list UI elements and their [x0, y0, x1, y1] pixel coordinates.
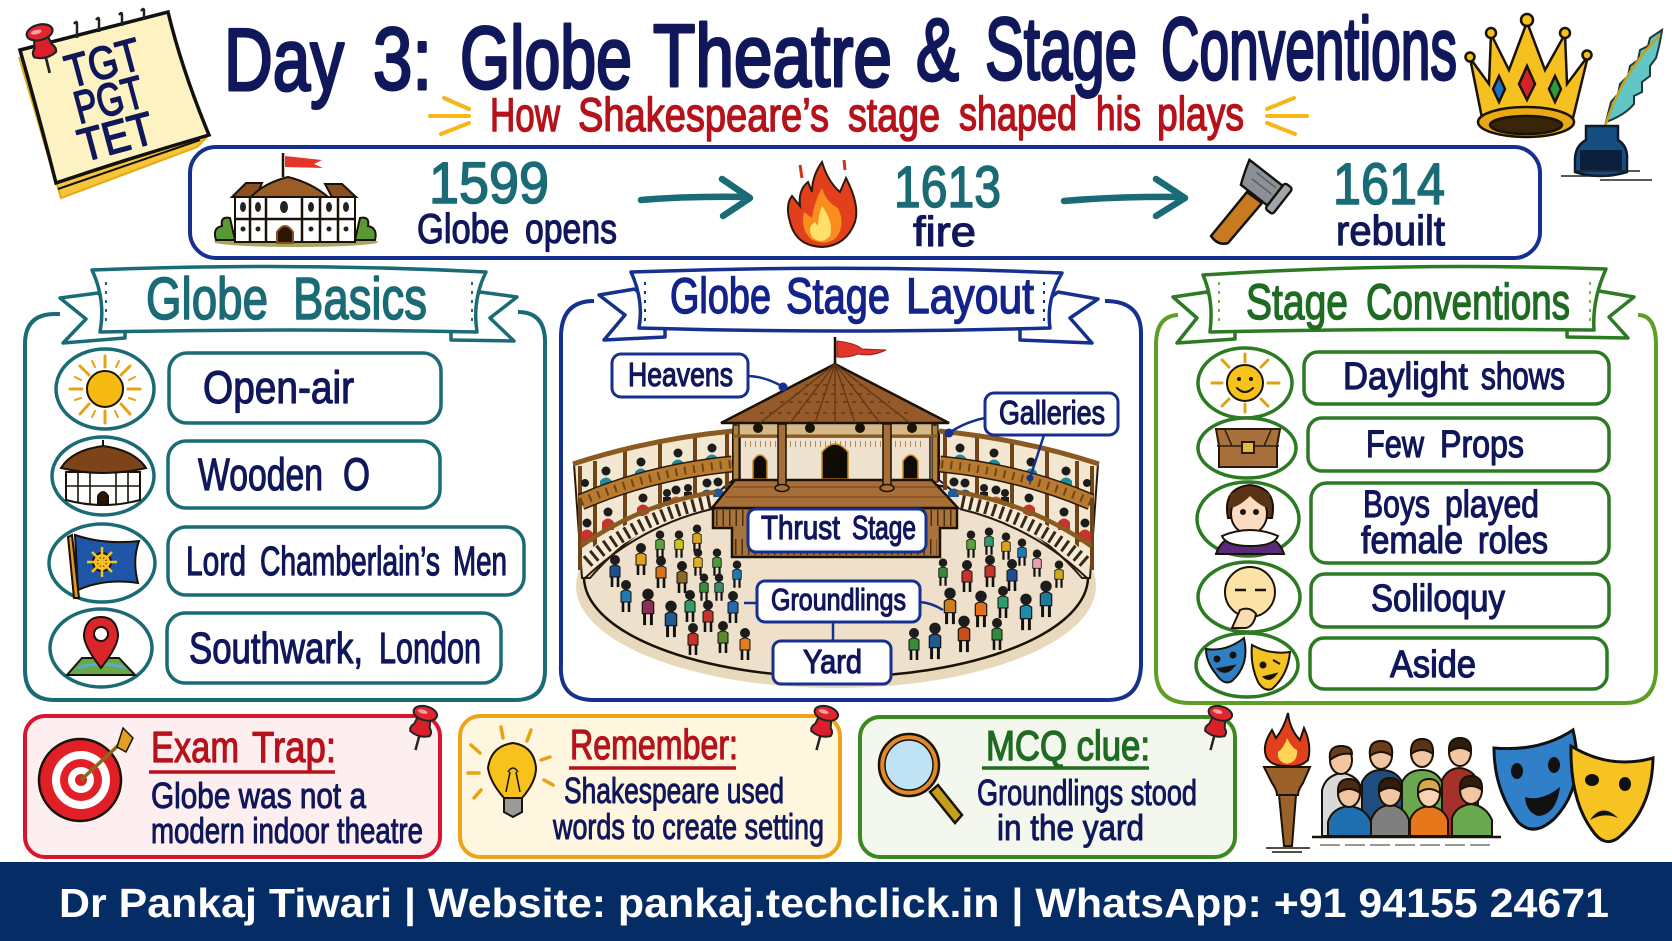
- stage house: [721, 337, 949, 482]
- row: Southwark, London: [50, 609, 501, 687]
- yard ground: [576, 477, 1096, 688]
- text: Exam Trap heading: Exam: [151, 723, 239, 772]
- icon: pushpin: [805, 703, 840, 753]
- banner: Globe Stage Layout: [599, 268, 1098, 343]
- icon: target with arrow: [39, 728, 133, 821]
- arrow: 1599 to 1613: [641, 179, 750, 216]
- subtitle: shaped: [959, 87, 1077, 140]
- banner: Globe Stage Layout: Globe: [670, 268, 771, 324]
- text: Remember body: Shakespeare used: [564, 770, 784, 811]
- icon: crown: [1466, 14, 1592, 137]
- diagram: theatre: [573, 337, 1118, 688]
- row: Open-air: Open-air: [203, 362, 354, 413]
- icon: chest: [1216, 429, 1280, 467]
- row: Boys played female roles: Boys: [1363, 484, 1430, 526]
- row: Boys played female roles: [1197, 482, 1609, 563]
- panel: timeline: [190, 147, 1540, 258]
- callout: Yard: Yard: [803, 643, 862, 680]
- banner: Stage Conventions: Conventions: [1366, 274, 1570, 330]
- icon: blue flag: [68, 535, 139, 598]
- text: MCQ clue body: Groundlings stood: [977, 772, 1197, 813]
- subtitle: How: [490, 88, 561, 141]
- text: Remember body: words to create setting: [552, 806, 824, 847]
- icon: magnifying glass: [879, 734, 962, 823]
- callout: MCQ clue: [860, 703, 1235, 857]
- icon: sun: [70, 356, 140, 423]
- title: Theatre: [653, 6, 892, 105]
- icon: pushpin: [404, 703, 439, 753]
- left gallery: [573, 431, 733, 578]
- text: 1599 Globe opens: 1599: [429, 151, 549, 216]
- yard crowd: [610, 525, 1063, 660]
- icon: quill and ink bottle: [1561, 30, 1662, 180]
- sticky note: TGT PGT TET: TET: [72, 102, 159, 171]
- title: Conventions: [1161, 0, 1457, 98]
- banner: Stage Conventions: Stage: [1246, 274, 1348, 330]
- subtitle: his: [1096, 87, 1141, 140]
- title: [224, 0, 1457, 109]
- callout: Groundlings: [744, 581, 943, 641]
- title: &: [916, 0, 959, 99]
- text: Exam Trap body: modern indoor theatre: [151, 810, 423, 851]
- row: Daylight shows: [1198, 348, 1609, 418]
- icon: round theatre: [61, 440, 146, 505]
- icon: smiling sun: [1212, 354, 1279, 412]
- row: Boys played female roles: played: [1445, 484, 1539, 526]
- callout: Yard: [773, 641, 891, 684]
- callout: Galleries: Galleries: [999, 394, 1105, 431]
- right gallery: [939, 431, 1099, 578]
- row: Wooden O: O: [343, 449, 370, 500]
- banner: Globe Stage Layout: Stage: [786, 268, 890, 324]
- row: Boys played female roles: roles: [1478, 520, 1548, 562]
- row: Lord Chamberlain's Men: Men: [453, 538, 507, 584]
- row: Soliloquy: Soliloquy: [1371, 578, 1505, 620]
- text: 1599 Globe opens: opens: [525, 205, 617, 252]
- row: Wooden O: Wooden: [198, 449, 323, 500]
- row: Soliloquy: [1198, 562, 1609, 632]
- row: Open-air: [56, 349, 441, 429]
- sticky note: TGT PGT TET: [19, 9, 209, 198]
- callout: Thrust Stage: [748, 509, 926, 552]
- subtitle: Shakespeare’s: [578, 88, 829, 141]
- icon: thinking face: [1225, 567, 1275, 628]
- callout: Thrust Stage: Thrust: [761, 509, 840, 546]
- icon: torch: [1264, 713, 1310, 852]
- icon: pushpin: [1199, 703, 1234, 753]
- sticky note: TGT PGT TET: PGT: [68, 65, 149, 134]
- icon: red pushpin on note: [25, 22, 63, 76]
- callout: Remember: [460, 703, 840, 857]
- text: MCQ clue heading: MCQ clue:: [986, 722, 1150, 769]
- row: Boys played female roles: female: [1361, 520, 1463, 562]
- icon: hammer: [1211, 157, 1293, 244]
- row: Lord Chamberlain's Men: Chamberlain’s: [260, 538, 440, 584]
- text: 1599 Globe opens: [417, 151, 617, 252]
- row: Southwark, London: London: [379, 624, 481, 673]
- row: Southwark, London: Southwark,: [189, 624, 363, 673]
- text: Exam Trap body: Globe was not a: [151, 775, 367, 816]
- footer bar: Dr Pankaj Tiwari | Website: pankaj.techclick.in | WhatsApp: +91 94155 24671: [59, 880, 1609, 926]
- row: Wooden O: [52, 437, 440, 515]
- row: Lord Chamberlain's Men: Lord: [186, 538, 246, 584]
- text: 1599 Globe opens: Globe: [417, 205, 509, 252]
- text: 1614 rebuilt: rebuilt: [1336, 207, 1445, 254]
- callout: Heavens: [612, 354, 788, 397]
- icon: comedy and tragedy masks: [1494, 730, 1653, 842]
- row: Aside: [1196, 633, 1607, 697]
- text: MCQ clue body: in the yard: [997, 807, 1144, 848]
- text: 1613 fire: 1613: [894, 155, 1001, 220]
- icon: fire: [788, 160, 856, 247]
- panel: Globe Stage Layout: [561, 268, 1141, 700]
- arrow: 1613 to 1614: [1064, 179, 1185, 216]
- icon: globe building: [214, 153, 378, 247]
- banner: Globe Stage Layout: Layout: [906, 268, 1034, 324]
- panel: Globe Basics: [25, 266, 545, 700]
- sticky note: TGT PGT TET: TGT: [59, 28, 146, 97]
- text: Exam Trap heading: Trap:: [252, 723, 336, 772]
- row: Daylight shows: Daylight: [1343, 356, 1468, 398]
- subtitle: [490, 87, 1244, 141]
- callout: Heavens: Heavens: [628, 356, 733, 393]
- icon: boy with ruff: [1216, 485, 1284, 554]
- title: 3:: [373, 9, 432, 108]
- banner: Globe Basics: Basics: [293, 266, 427, 332]
- icon: light bulb: [468, 727, 553, 817]
- banner: Stage Conventions: [1173, 267, 1634, 343]
- flag on roof: [835, 337, 886, 364]
- title: Day: [224, 10, 344, 109]
- row: Aside: Aside: [1390, 644, 1476, 686]
- text: 1614 rebuilt: 1614: [1333, 152, 1445, 217]
- title: Globe: [460, 8, 632, 107]
- row: Daylight shows: shows: [1481, 356, 1565, 398]
- thrust stage platform: [712, 424, 958, 557]
- roof: [721, 364, 949, 423]
- text: 1613 fire: [894, 155, 1001, 255]
- text: MCQ clue body: [977, 772, 1197, 848]
- callout: Groundlings: Groundlings: [771, 582, 906, 617]
- footer bar: [0, 862, 1672, 941]
- icon: right sparks: [1267, 98, 1307, 134]
- icon: left sparks: [430, 98, 469, 134]
- text: 1613 fire: fire: [913, 208, 976, 255]
- row: Few Props: Few: [1366, 424, 1424, 466]
- banner: Globe Basics: Globe: [146, 266, 268, 332]
- callout: Exam Trap: [25, 703, 440, 857]
- panel: Stage Conventions: [1156, 267, 1656, 703]
- subtitle: stage: [848, 88, 940, 141]
- text: Exam Trap heading: [149, 723, 336, 772]
- icon: audience group: [1312, 738, 1501, 845]
- text: Remember body: [552, 770, 824, 847]
- text: 1614 rebuilt: [1333, 152, 1445, 254]
- text: Exam Trap body: [151, 775, 423, 851]
- callout: Galleries: [944, 393, 1118, 482]
- subtitle: plays: [1157, 87, 1244, 140]
- title: Stage: [985, 0, 1137, 98]
- row: Few Props: Props: [1440, 424, 1524, 466]
- text: Remember heading: Remember:: [570, 721, 738, 768]
- callout: Thrust Stage: Stage: [852, 509, 916, 546]
- icon: map pin: [67, 617, 135, 675]
- row: Lord Chamberlain's Men: [49, 524, 524, 602]
- row: Few Props: [1198, 418, 1609, 478]
- banner: Globe Basics: [60, 266, 517, 343]
- icon: small masks: [1206, 638, 1290, 690]
